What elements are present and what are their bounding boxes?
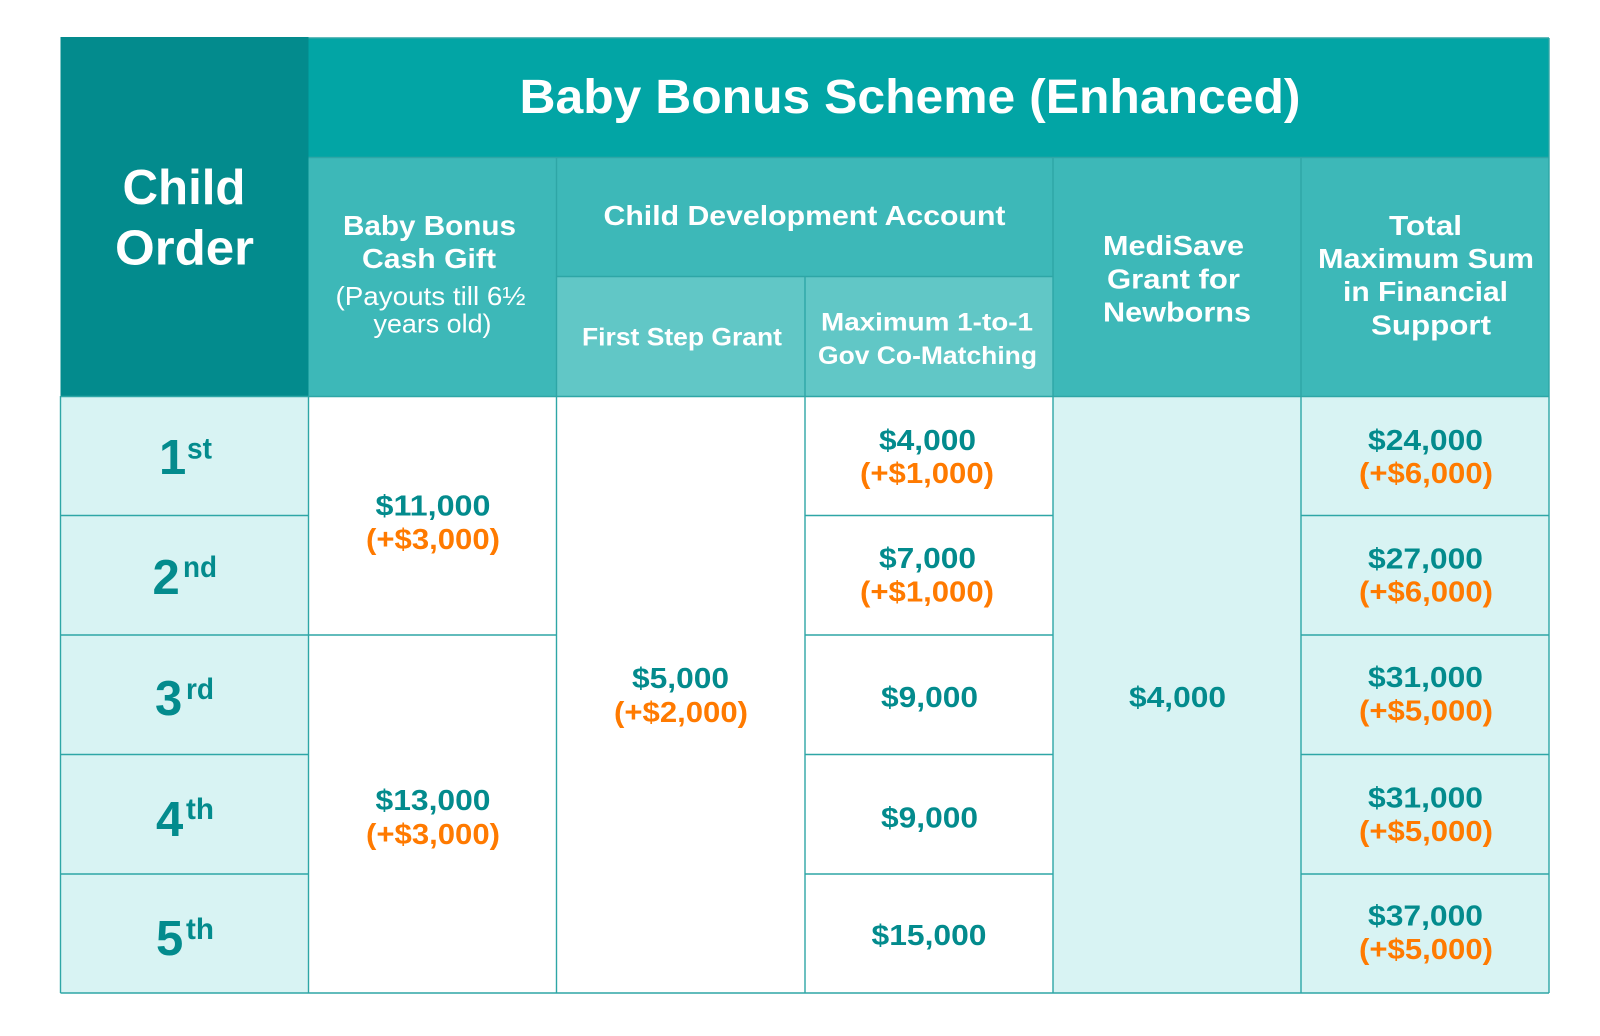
first step grant value: $5,000 — [632, 663, 729, 695]
cash gift: 3rd to 5th — [366, 785, 500, 851]
co-matching: 2nd: (+$1,000) — [860, 576, 994, 608]
title: Baby Bonus Scheme (Enhanced) — [308, 38, 1549, 158]
cash gift: 1st and 2nd: (+$3,000) — [366, 524, 500, 556]
column header: MediSave Grant for Newborns — [1053, 158, 1301, 396]
total: 5th: $37,000 — [1368, 900, 1483, 932]
total: 2nd — [1359, 544, 1493, 608]
title: Baby Bonus Scheme (Enhanced): Baby Bonus Scheme (Enhanced) — [520, 71, 1300, 124]
child order cells background — [60, 396, 308, 993]
column header: Child Development Account — [556, 158, 1053, 276]
row label: 2nd: nd — [183, 551, 217, 584]
total: 1st: $24,000 — [1368, 425, 1483, 457]
row label: 5th — [156, 912, 214, 966]
co-matching: 2nd: $7,000 — [879, 543, 976, 575]
column header: Total Maximum Sum in Financial Support: Total — [1389, 210, 1462, 241]
total: 1st — [1359, 425, 1493, 490]
total: 1st: (+$6,000) — [1359, 458, 1493, 490]
cash gift: 3rd to 5th: $13,000 — [376, 785, 490, 817]
first step grant value — [614, 663, 748, 729]
heading: child order column — [60, 37, 308, 396]
row label: 2nd: 2 — [152, 551, 180, 605]
total: 5th: (+$5,000) — [1359, 934, 1493, 966]
row label: 5th: th — [186, 913, 214, 946]
MediSave value: $4,000 — [1129, 682, 1226, 714]
total: 5th — [1359, 900, 1493, 966]
co-matching: 5th: $15,000 — [872, 920, 986, 952]
column header: Child Development Account: Child Development Account — [604, 200, 1006, 231]
total column background — [1301, 396, 1549, 993]
total: 3rd — [1359, 662, 1493, 728]
row label: 4th — [156, 793, 214, 847]
total: 2nd: (+$6,000) — [1359, 576, 1493, 608]
row label: 4th: 4 — [156, 793, 183, 847]
cash gift: 1st and 2nd — [366, 490, 500, 556]
total: 4th — [1359, 782, 1493, 848]
column header: MediSave Grant for Newborns: Newborns — [1103, 296, 1251, 328]
column header: Total Maximum Sum in Financial Support: Support — [1371, 310, 1491, 340]
co-matching: 2nd — [860, 543, 994, 608]
cash gift: 1st and 2nd: $11,000 — [376, 490, 490, 522]
row label: 3rd: 3 — [155, 672, 182, 726]
column header: Baby Bonus Cash Gift: (Payouts till 6½ — [336, 281, 526, 311]
total: 4th: (+$5,000) — [1359, 816, 1493, 848]
column header: Total Maximum Sum in Financial Support — [1301, 158, 1549, 396]
total: 2nd: $27,000 — [1368, 544, 1483, 576]
column header: MediSave Grant for Newborns: MediSave — [1103, 230, 1244, 261]
column header: MediSave Grant for Newborns: Grant for — [1107, 264, 1240, 294]
heading: child order column: Order — [115, 222, 254, 276]
total: 3rd: (+$5,000) — [1359, 696, 1493, 728]
co-matching: 1st — [860, 425, 994, 490]
cash gift: 3rd to 5th: (+$3,000) — [366, 819, 500, 851]
co-matching: 1st: (+$1,000) — [860, 458, 994, 490]
co-matching: 3rd: $9,000 — [881, 682, 978, 714]
column header: Total Maximum Sum in Financial Support: in Financial — [1343, 276, 1508, 307]
heading: child order column: Child — [122, 161, 246, 215]
row label: 4th: th — [186, 793, 214, 826]
sub-header: Maximum 1-to-1 Gov Co-Matching — [805, 276, 1053, 396]
sub-header: First Step Grant — [556, 276, 805, 396]
column header: Baby Bonus Cash Gift: Baby Bonus — [343, 210, 516, 241]
total: 4th: $31,000 — [1368, 782, 1483, 814]
first step grant value: (+$2,000) — [614, 697, 748, 729]
column header: Total Maximum Sum in Financial Support: Maximum Sum — [1318, 243, 1534, 274]
sub-header: Maximum 1-to-1 Gov Co-Matching: Gov Co-Matching — [818, 342, 1037, 370]
MediSave column background — [1053, 396, 1301, 993]
row label: 1st: st — [187, 432, 212, 466]
sub-header: Maximum 1-to-1 Gov Co-Matching: Maximum 1-to-1 — [821, 308, 1033, 336]
co-matching: 1st: $4,000 — [879, 425, 976, 457]
row label: 3rd — [155, 672, 214, 726]
row label: 1st: 1 — [159, 431, 186, 485]
column header: Baby Bonus Cash Gift — [308, 158, 556, 396]
co-matching: 4th: $9,000 — [881, 802, 978, 834]
row label: 1st — [159, 431, 212, 485]
row label: 2nd — [152, 551, 217, 605]
column header: Baby Bonus Cash Gift: years old) — [374, 308, 492, 338]
column header: Baby Bonus Cash Gift: Cash Gift — [362, 243, 496, 274]
total: 3rd: $31,000 — [1368, 662, 1483, 694]
sub-header: First Step Grant: First Step Grant — [582, 324, 783, 352]
row label: 3rd: rd — [186, 673, 214, 706]
row label: 5th: 5 — [156, 912, 183, 966]
